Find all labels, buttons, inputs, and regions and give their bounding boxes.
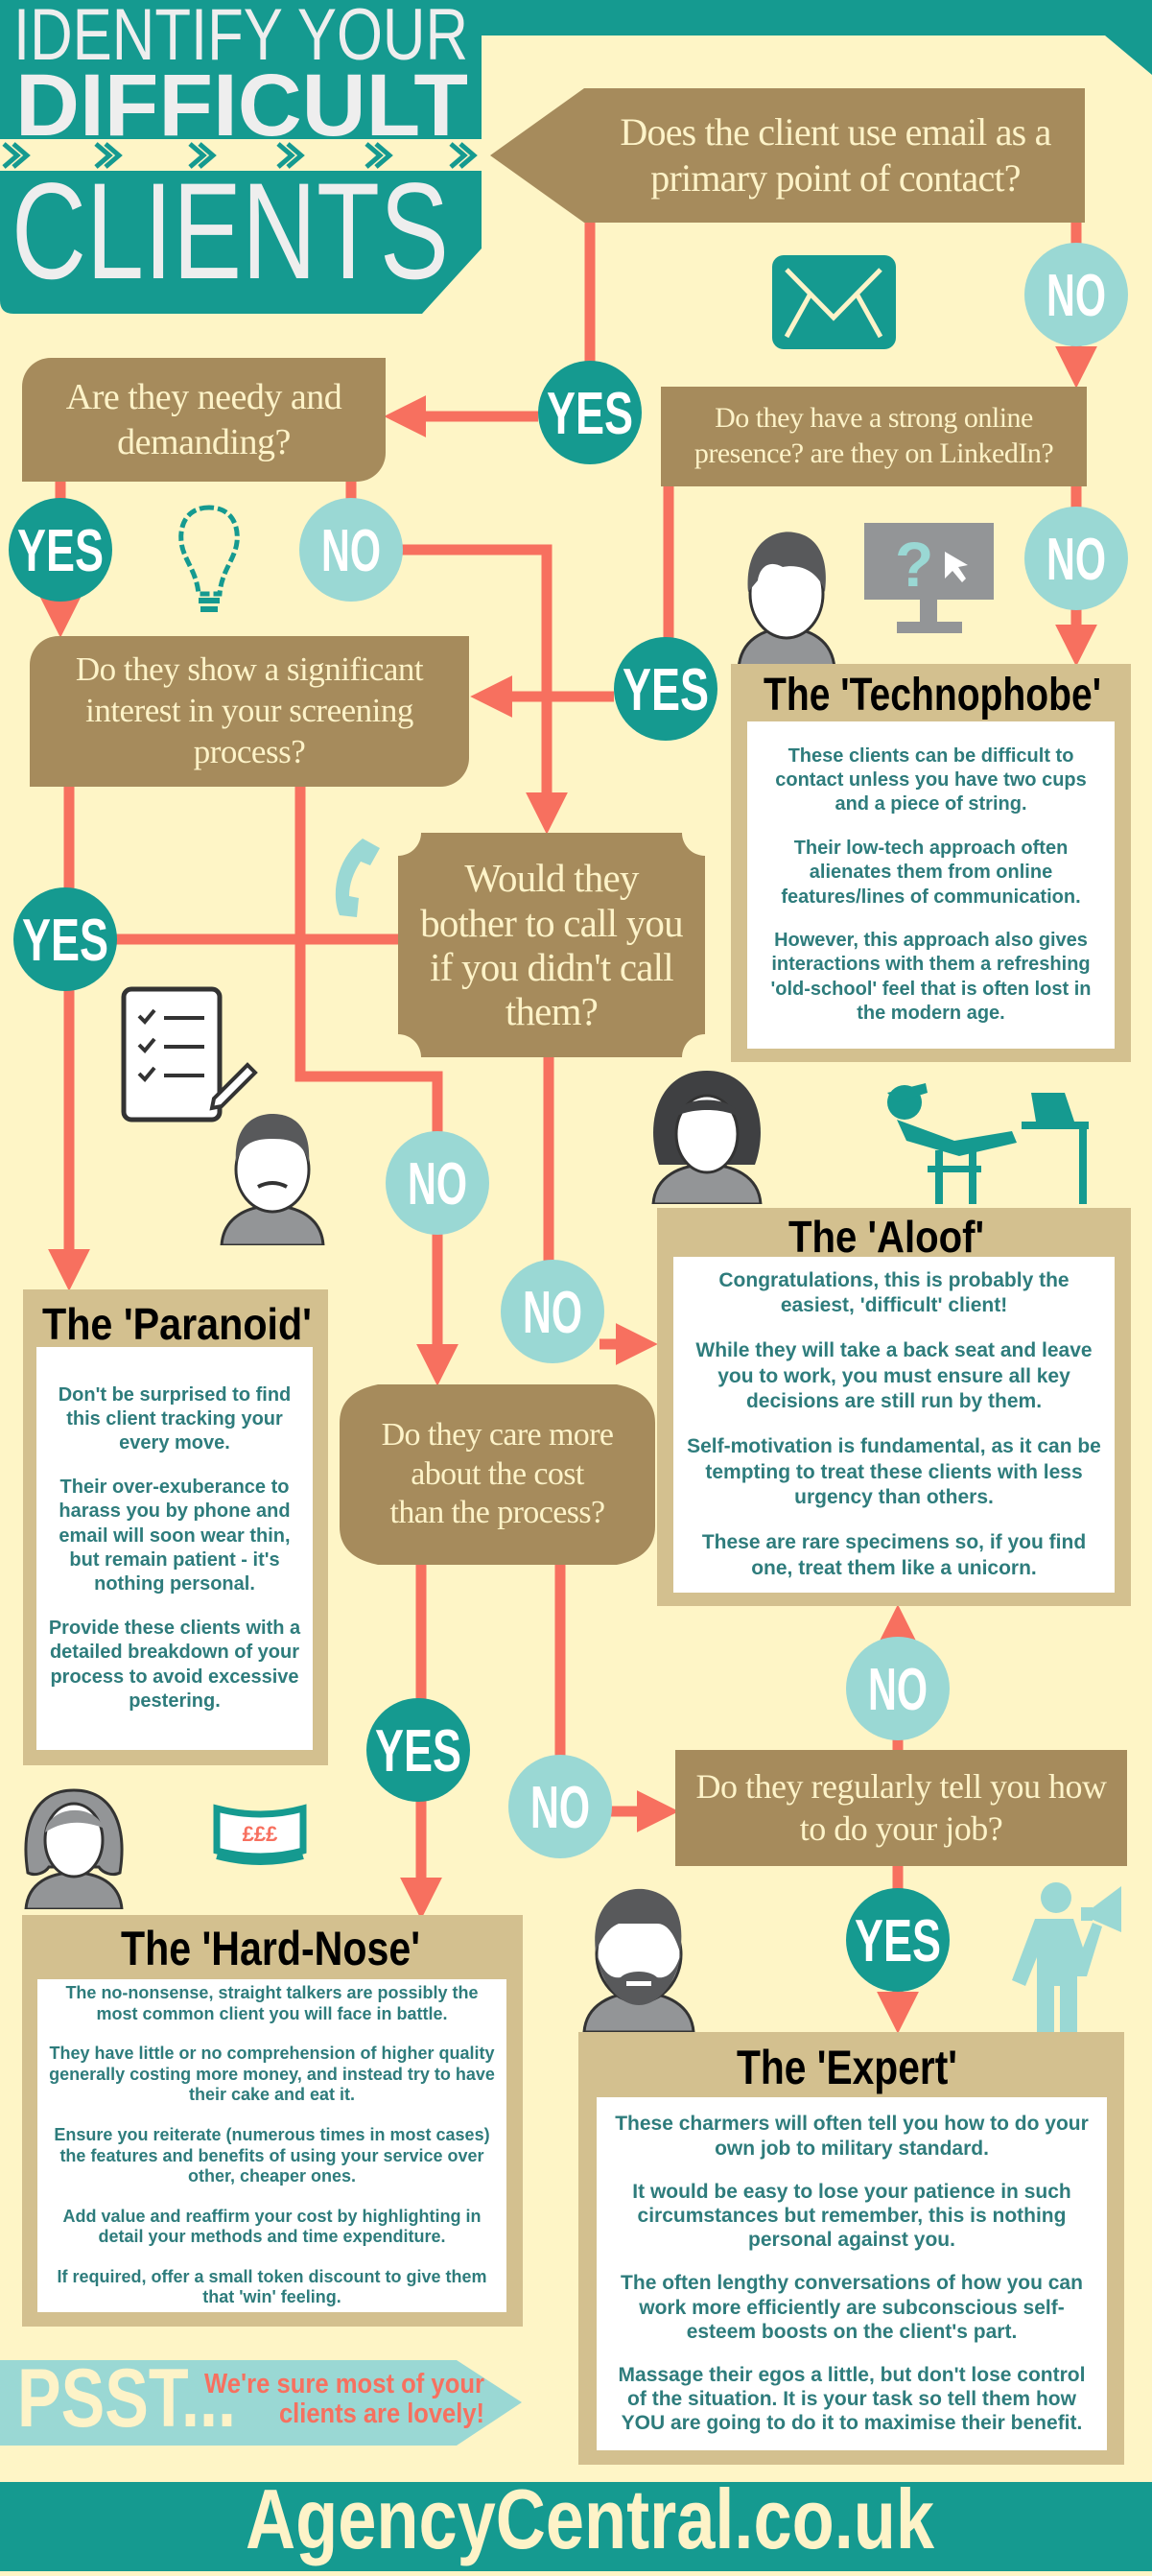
panel: Paranoid: Provide these clients with a detailed breakdown of your process to avoid excessive pestering. [49,1618,300,1712]
Q6: Do they care more [382,1417,613,1453]
icon: technophobe person [738,532,835,664]
YES/NO circles [9,243,1128,1992]
icon: hard-nose woman [24,1788,124,1909]
icon: money [213,1804,307,1865]
panel: Expert: The 'Expert' [737,2041,957,2094]
panel: Hard-Nose: Add value and reaffirm your cost by highlighting in detail your methods and time expenditure. [62,2207,482,2246]
YES/NO circles: NO [1046,527,1106,593]
panel: Paranoid: Don't be surprised to find this client tracking your every move. [59,1384,291,1453]
title: DIFFICULT [15,57,468,154]
icon: aloof person [652,1071,762,1204]
panel: Aloof: While they will take a back seat and leave you to work, you must ensure all key decisions are still run by them. [695,1339,1093,1412]
icon: megaphone man [1012,1882,1121,2032]
icon: phone [336,839,380,917]
Q1 banner: primary point of contact? [650,156,1021,200]
icon: money: £££ [243,1822,278,1846]
YES/NO circles: NO [1046,263,1106,329]
Q6 [340,1384,655,1565]
panel: Paranoid [23,1289,328,1765]
YES/NO circles: NO [408,1151,467,1217]
YES/NO circles: YES [547,381,633,447]
panel: Aloof: Self-motivation is fundamental, as it can be tempting to treat these clients with less urgency than others. [687,1435,1101,1508]
panel: Hard-Nose: The no-nonsense, straight talkers are possibly the most common client you will face in battle. [65,1983,479,2023]
panel: Aloof: Congratulations, this is probably the easiest, 'difficult' client! [718,1269,1070,1316]
panel: Technophobe [731,664,1131,1062]
Q3: Do they have a strong online [715,402,1033,434]
callout: PSST: clients are lovely! [279,2399,484,2429]
footer [0,2482,1152,2571]
Q4 [30,636,469,787]
Q5 [398,833,705,1057]
icon: email [772,255,896,349]
Q4: process? [194,733,305,770]
Q5: them? [505,989,598,1033]
Q2: demanding? [117,422,291,462]
YES/NO circles: YES [855,1908,941,1974]
title [0,0,482,314]
panel: Paranoid: Their over-exuberance to harass you by phone and email will soon wear thin, but remain patient - it's nothing personal. [59,1477,291,1595]
top band [482,0,1152,75]
YES/NO circles: YES [22,908,108,974]
Q3: presence? are they on LinkedIn? [694,437,1053,469]
icon: relaxing person [887,1083,1089,1204]
Q5: bother to call you [420,901,683,945]
Q4: Do they show a significant [76,650,423,688]
YES/NO circles: YES [623,657,709,723]
YES/NO circles: NO [530,1775,590,1841]
panel: Technophobe: These clients can be difficult to contact unless you have two cups and a piece of string. [775,745,1087,815]
icon: lightbulb [178,505,240,612]
panel: Hard-Nose: If required, offer a small token discount to give them that 'win' feeling. [57,2267,487,2306]
Q3 [661,387,1087,486]
Q7: Do they regularly tell you how [696,1767,1106,1806]
YES/NO circles: NO [868,1657,928,1723]
YES/NO circles: YES [17,518,104,584]
panel: Aloof: These are rare specimens so, if you find one, treat them like a unicorn. [702,1531,1086,1579]
icon: expert person [583,1888,694,2032]
Q5: if you didn't call [430,945,673,989]
Q4: interest in your screening [85,692,413,729]
panel: Technophobe: However, this approach also gives interactions with them a refreshing 'old-school' feel that is often lost in the modern age. [771,930,1091,1024]
icon: clipboard [121,986,258,1123]
panel: Aloof [657,1208,1131,1606]
panel: Hard-Nose: Ensure you reiterate (numerous times in most cases) the features and benefits of using your service over other, cheaper ones. [54,2125,490,2186]
callout: PSST [0,2360,522,2446]
Q2 [22,358,386,482]
icon: monitor [864,523,994,633]
Q6: about the cost [411,1456,584,1492]
YES/NO circles: NO [321,518,381,584]
callout: PSST: We're sure most of your [204,2369,484,2399]
YES/NO circles: YES [375,1718,461,1784]
Q1 banner: Does the client use email as a [620,110,1051,154]
panel: Hard-Nose [22,1915,523,2327]
panel: Hard-Nose: The 'Hard-Nose' [121,1922,420,1975]
icon: paranoid person [221,1114,324,1245]
panel: Expert [578,2032,1124,2465]
panel: Expert: Massage their egos a little, but don't lose control of the situation. It is your task so tell them how YOU are going to do it to maximise their benefit. [619,2364,1085,2434]
panel: Hard-Nose: They have little or no comprehension of higher quality generally costing more money, and instead try to have their cake and eat it. [49,2044,495,2104]
panel: Expert: The often lengthy conversations of how you can work more efficiently are subconscious self-esteem boosts on the client's part. [621,2272,1083,2343]
panel: Expert: It would be easy to lose your patience in such circumstances but remember, this is nothing personal against you. [632,2181,1071,2251]
Q2: Are they needy and [66,377,341,417]
Q7: to do your job? [800,1809,1002,1848]
Q5: Would they [464,856,639,900]
YES/NO circles: NO [523,1280,582,1346]
Q1 banner [490,88,1085,223]
Q6: than the process? [390,1495,604,1530]
panel: Technophobe: Their low-tech approach often alienates them from online features/lines of communication. [781,838,1081,908]
panel: Expert: These charmers will often tell you how to do your own job to military standard. [615,2113,1089,2160]
Q7 [675,1750,1127,1866]
icon: monitor: ? [895,529,933,600]
